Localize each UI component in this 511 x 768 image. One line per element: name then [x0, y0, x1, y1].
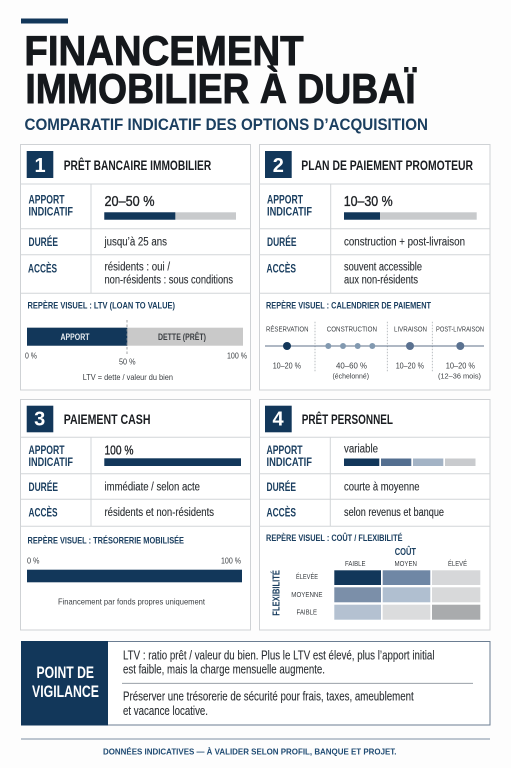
chart: cost / flexibility matrix: FLEXIBILITÉ: [270, 570, 282, 616]
row: durée: DURÉE: [267, 236, 297, 249]
row: apport indicatif: APPORT: [267, 194, 303, 206]
chart: payment timeline: (échelonné): [332, 372, 369, 381]
chart: payment timeline: (12–36 mois): [438, 372, 481, 381]
chart: cost / flexibility matrix: FAIBLE: [296, 607, 317, 616]
row: accès: résidents : oui /: [104, 262, 171, 274]
title: [24, 27, 417, 112]
row: apport indicatif: 20–50 %: [104, 194, 155, 210]
callout heading: POINT DE: [36, 663, 94, 682]
chart: payment timeline: 10–20 %: [273, 360, 301, 370]
row: durée: [28, 481, 200, 494]
chart: payment timeline: [265, 322, 484, 381]
repère visuel heading: REPÈRE VISUEL : CALENDRIER DE PAIEMENT: [266, 301, 431, 312]
number badge 1: [27, 151, 53, 178]
chart: LTV bar: [25, 320, 247, 382]
panel heading: PRÊT BANCAIRE IMMOBILIER: [64, 158, 211, 173]
title: FINANCEMENT: [24, 27, 304, 74]
chart: cost / flexibility matrix: FAIBLE: [345, 559, 366, 568]
panel heading: PRÊT PERSONNEL: [302, 412, 393, 427]
row: accès: ACCÈS: [28, 263, 57, 276]
title: IMMOBILIER À DUBAÏ: [25, 65, 417, 112]
chart: payment timeline: RÉSERVATION: [266, 325, 308, 334]
row: durée: [28, 236, 167, 249]
row: durée: [267, 236, 465, 249]
row: apport indicatif: [267, 194, 477, 220]
row: accès: [28, 507, 214, 520]
number badge 2: 2: [273, 155, 284, 177]
row: apport indicatif: [28, 194, 236, 220]
chart: LTV bar: 0 %: [25, 350, 37, 360]
row: accès: selon revenus et banque: [344, 507, 444, 519]
row: apport indicatif: [28, 442, 241, 469]
row: durée: construction + post-livraison: [344, 236, 465, 248]
chart: LTV bar: 50 %: [119, 356, 136, 366]
row: accès: résidents et non-résidents: [104, 507, 214, 519]
repère visuel heading: REPÈRE VISUEL : COÛT / FLEXIBILITÉ: [266, 532, 402, 544]
repère visuel heading: REPÈRE VISUEL : TRÉSORERIE MOBILISÉE: [28, 535, 184, 546]
row: apport indicatif: INDICATIF: [28, 207, 73, 219]
callout: point de vigilance: [21, 641, 490, 726]
row: accès: aux non-résidents: [344, 274, 418, 286]
panel heading: PAIEMENT CASH: [64, 412, 151, 427]
row: accès: ACCÈS: [28, 507, 58, 520]
row: apport indicatif: INDICATIF: [28, 457, 73, 469]
chart: payment timeline: POST-LIVRAISON: [436, 325, 484, 334]
number badge 1: 1: [34, 155, 46, 177]
panel: paiement cash: [20, 400, 250, 630]
row: durée: [266, 481, 420, 494]
row: accès: non-résidents : sous conditions: [104, 274, 233, 286]
row: accès: [28, 262, 233, 286]
row: accès: [266, 507, 444, 520]
subtitle: COMPARATIF INDICATIF DES OPTIONS D’ACQUISITION: [24, 116, 428, 134]
row: apport indicatif: APPORT: [28, 445, 64, 457]
panel: prêt personnel: [260, 400, 490, 630]
chart: trésorerie bar: [27, 556, 242, 606]
row: apport indicatif: [266, 444, 476, 469]
callout heading: [32, 663, 99, 701]
callout heading: VIGILANCE: [32, 682, 99, 701]
row: apport indicatif: INDICATIF: [267, 207, 312, 219]
row: durée: DURÉE: [28, 481, 58, 494]
panel: prêt bancaire immobilier: [20, 144, 250, 390]
number badge 4: [265, 406, 292, 432]
row: accès: [266, 262, 422, 286]
chart: LTV bar: LTV = dette / valeur du bien: [83, 372, 173, 382]
chart: cost / flexibility matrix: COÛT: [395, 545, 416, 558]
footer note: DONNÉES INDICATIVES — À VALIDER SELON PROFIL, BANQUE ET PROJET.: [103, 746, 396, 756]
chart: LTV bar: 100 %: [227, 350, 247, 360]
chart: cost / flexibility matrix: [270, 545, 480, 620]
row: accès: souvent accessible: [344, 262, 422, 274]
chart: trésorerie bar: 0 %: [27, 556, 40, 566]
row: apport indicatif: INDICATIF: [266, 457, 312, 469]
row: apport indicatif: APPORT: [266, 445, 302, 457]
chart: cost / flexibility matrix: ÉLEVÉE: [296, 572, 318, 581]
row: apport indicatif: 10–30 %: [344, 194, 393, 210]
row: durée: jusqu’à 25 ans: [104, 236, 167, 248]
accent bar: [21, 18, 68, 24]
chart: payment timeline: 40–60 %: [336, 360, 367, 370]
chart: trésorerie bar: Financement par fonds propres uniquement: [58, 596, 206, 606]
row: apport indicatif: variable: [344, 444, 378, 456]
callout text: LTV: [123, 648, 434, 677]
number badge 3: 3: [34, 409, 45, 431]
callout text: LTV: est faible, mais la charge mensuelle augmente.: [123, 663, 325, 677]
chart: trésorerie bar: 100 %: [221, 556, 241, 566]
callout text: trésorerie: [123, 690, 414, 718]
callout text: trésorerie: et vacance locative.: [123, 704, 208, 718]
number badge 2: [265, 151, 292, 178]
row: apport indicatif: APPORT: [28, 194, 64, 206]
row: durée: DURÉE: [28, 236, 58, 249]
row: durée: courte à moyenne: [344, 482, 420, 494]
callout text: trésorerie: Préserver une trésorerie de sécurité pour frais, taxes, ameublement: [123, 690, 414, 704]
row: accès: ACCÈS: [266, 263, 296, 276]
row: durée: immédiate / selon acte: [104, 482, 200, 494]
chart: cost / flexibility matrix: ÉLEVÉ: [448, 559, 467, 568]
chart: payment timeline: LIVRAISON: [394, 325, 427, 334]
repère visuel heading: REPÈRE VISUEL : LTV (LOAN TO VALUE): [28, 301, 175, 312]
number badge 3: [27, 406, 53, 432]
row: apport indicatif: 100 %: [104, 442, 134, 457]
chart: cost / flexibility matrix: MOYENNE: [291, 590, 322, 599]
chart: LTV bar: DETTE (PRÊT): [158, 331, 206, 342]
row: accès: ACCÈS: [266, 507, 296, 520]
number badge 4: 4: [272, 409, 284, 431]
chart: LTV bar: APPORT: [60, 332, 90, 342]
chart: payment timeline: CONSTRUCTION: [327, 325, 377, 334]
chart: payment timeline: 10–20 %: [446, 360, 475, 370]
chart: payment timeline: 10–20 %: [396, 360, 424, 370]
panel: plan de paiement promoteur: [260, 144, 490, 390]
row: durée: DURÉE: [266, 481, 296, 494]
chart: cost / flexibility matrix: MOYEN: [394, 559, 417, 568]
